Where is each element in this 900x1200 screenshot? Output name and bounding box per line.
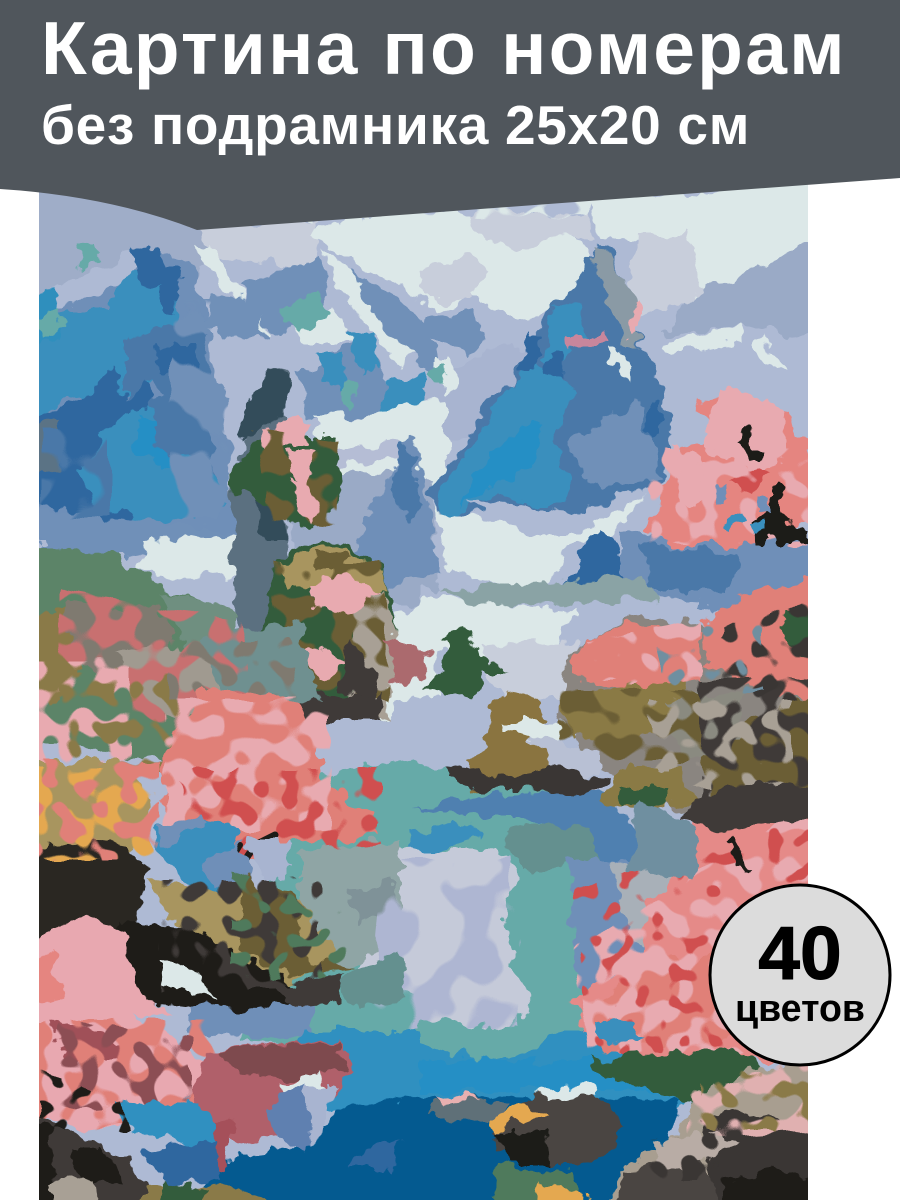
large red blossom tree	[160, 690, 380, 860]
cloud under main peak	[434, 487, 648, 587]
upper tree on pillar	[232, 415, 345, 530]
header banner	[0, 0, 900, 230]
lower left dark shore	[39, 1069, 266, 1200]
right middle dark foliage edge	[600, 770, 810, 880]
left blue mountains	[20, 240, 235, 555]
left dark rocks and orange foliage	[20, 760, 410, 1020]
red reflection in water	[190, 1040, 350, 1170]
central snowy ridges	[194, 244, 486, 422]
rock pillar	[232, 368, 290, 680]
lower left pink blossoms	[20, 1010, 220, 1130]
island with olive trees	[440, 690, 610, 795]
lake surface	[190, 690, 700, 1200]
blue gap under blossoms	[150, 815, 290, 895]
right bottom green bank and rocks	[590, 1050, 820, 1200]
green pine by the water	[425, 628, 503, 700]
subtitle: без подрамника 25х20 см	[41, 94, 750, 156]
central small peak	[350, 433, 440, 590]
title: Картина по номерам	[41, 6, 847, 90]
painting: mountain lake landscape	[20, 170, 820, 1200]
mountain reflection	[270, 1085, 335, 1155]
right upper pink tree	[645, 390, 820, 545]
right lower pink blossoms	[570, 800, 820, 1060]
white cloud bank behind centre	[140, 400, 445, 610]
teal glacier patch	[282, 292, 328, 332]
right mid foliage	[560, 580, 820, 810]
left hillside and blossoms	[20, 550, 320, 780]
lower trees on pillar	[265, 540, 430, 720]
sky and clouds	[39, 184, 808, 340]
right lavender sky and mid slopes	[380, 325, 820, 720]
colour count badge	[710, 885, 890, 1065]
main blue peak	[428, 247, 672, 522]
colour count badge: цветов	[735, 988, 865, 1030]
boulders in water	[428, 1084, 625, 1200]
tree trunk branches	[237, 832, 278, 860]
colour count badge: 40	[758, 911, 842, 995]
